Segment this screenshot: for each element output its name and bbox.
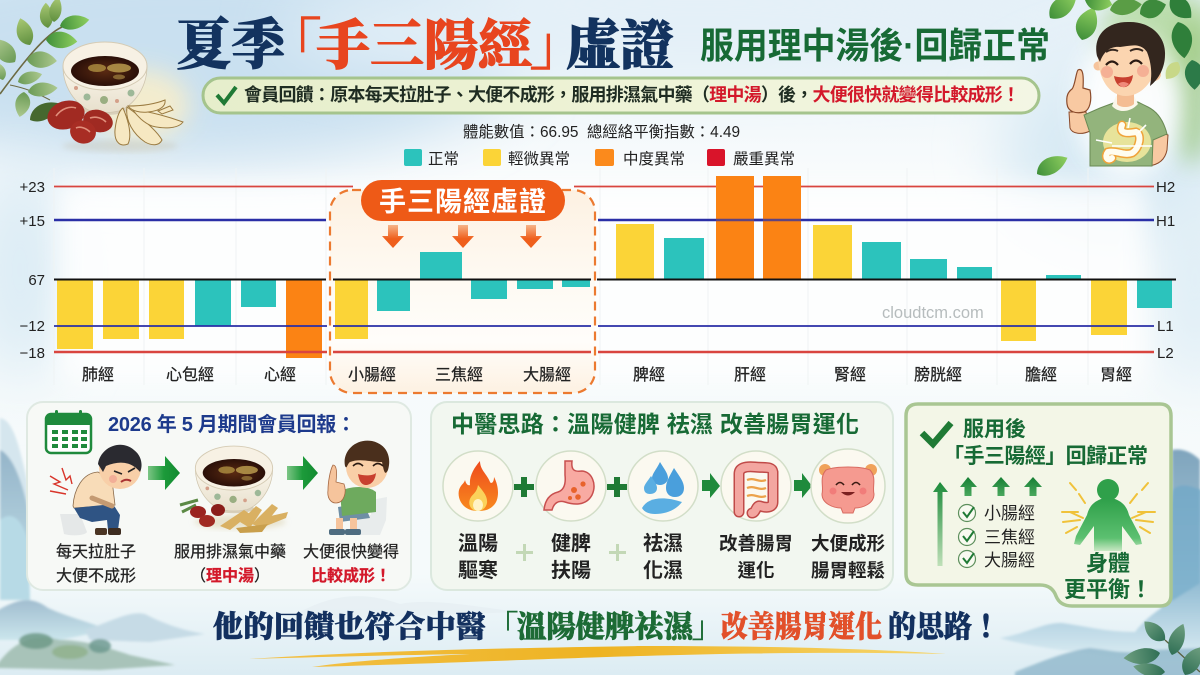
footer conclusion bbox=[213, 610, 1000, 644]
footer conclusion: 」 bbox=[692, 611, 722, 644]
plus bbox=[607, 477, 627, 497]
caption: warm yang: 溫陽 bbox=[458, 532, 498, 555]
title: 夏季 bbox=[176, 15, 289, 76]
caption: intestines: 改善腸胃 bbox=[719, 533, 793, 554]
icon: check bbox=[217, 87, 236, 103]
meridian labels: 膀胱經 bbox=[914, 366, 962, 384]
checklist: 小腸經 bbox=[984, 504, 1035, 523]
icon: happy boy on toilet bbox=[328, 441, 389, 535]
title: 手三陽經 bbox=[316, 16, 532, 76]
leaves bottom-right bbox=[1123, 617, 1200, 675]
footer conclusion: 改善腸胃運化 bbox=[721, 611, 882, 644]
icon: smiling intestine bbox=[811, 449, 885, 523]
icon: intestines bbox=[721, 451, 791, 521]
text: before bbox=[56, 543, 136, 585]
red dates bbox=[44, 96, 115, 146]
member feedback banner: 會員回饋：原本每天拉肚子、大便不成形，服用排濕氣中藥（理中湯）後，大便很快就變得比較成形！ bbox=[244, 84, 1020, 105]
meridian labels: 心包經 bbox=[166, 366, 214, 384]
caption: spleen: 健脾 bbox=[551, 532, 591, 555]
gold brush stroke bbox=[249, 646, 946, 667]
callout pill bbox=[361, 180, 565, 221]
highlight box: three yang meridians bbox=[330, 190, 595, 393]
axis labels: L1 bbox=[1157, 318, 1174, 335]
text: medicine: 服用排濕氣中藥 bbox=[174, 543, 286, 561]
title: 「 bbox=[266, 15, 321, 76]
legend: 輕微異常 bbox=[508, 150, 570, 168]
heading bbox=[943, 418, 1148, 468]
icon: calendar bbox=[46, 410, 91, 453]
panel: after treatment bbox=[906, 404, 1171, 606]
legend bbox=[404, 149, 795, 168]
heading: 2026 年 5 月期間會員回報： bbox=[108, 412, 356, 436]
footer conclusion: 溫陽健脾祛濕 bbox=[517, 611, 696, 644]
member feedback banner bbox=[203, 78, 1039, 113]
icon: water drops bbox=[628, 451, 698, 521]
panel: TCM reasoning bbox=[431, 402, 893, 590]
big arrow up bbox=[933, 482, 948, 566]
axis labels: H2 bbox=[1156, 179, 1175, 196]
mountains right bbox=[1000, 449, 1200, 675]
axis labels bbox=[20, 179, 1175, 362]
caption: spleen bbox=[551, 532, 591, 582]
caption: intestines bbox=[719, 533, 793, 581]
icon: herbal bowl bbox=[180, 446, 288, 533]
arrows down bbox=[382, 225, 542, 248]
meridian labels: 肺經 bbox=[82, 366, 114, 384]
arrow bbox=[287, 456, 318, 490]
meridian labels: 大腸經 bbox=[523, 366, 571, 384]
caption: dampness: 化濕 bbox=[643, 559, 683, 582]
meridian labels: 脾經 bbox=[633, 366, 665, 384]
text: after bbox=[303, 543, 399, 585]
icon: stomach bbox=[536, 451, 606, 521]
caption: spleen: 扶陽 bbox=[551, 559, 591, 582]
subtitle: 服用理中湯後·回歸正常 bbox=[700, 25, 1050, 66]
icon: check bbox=[922, 423, 951, 444]
footer conclusion: 他的回饋也符合中醫 bbox=[213, 610, 486, 644]
footer conclusion: 「 bbox=[488, 611, 518, 644]
caption: result: 大便成形 bbox=[811, 533, 885, 554]
arrow bbox=[702, 473, 720, 498]
mist hills bottom bbox=[300, 596, 520, 620]
checklist: 三焦經 bbox=[984, 528, 1035, 547]
arrow bbox=[148, 456, 180, 490]
title: 虛證 bbox=[566, 16, 674, 76]
text: before: 大便不成形 bbox=[56, 567, 136, 585]
meridian labels: 肝經 bbox=[734, 366, 766, 384]
arrow bbox=[794, 473, 812, 498]
legend: 嚴重異常 bbox=[733, 150, 795, 168]
legend: 中度異常 bbox=[623, 150, 685, 168]
illustration: herbal soup bowl with dates and licorice bbox=[44, 42, 190, 152]
physical values: 體能數值：66.95 總經絡平衡指數：4.49 bbox=[463, 123, 740, 141]
legend: 正常 bbox=[428, 150, 459, 168]
axis labels: L2 bbox=[1157, 345, 1174, 362]
plus bbox=[514, 477, 534, 497]
faint plus bbox=[609, 544, 626, 561]
shirt bbox=[1084, 102, 1167, 166]
heading: 中醫思路：溫陽健脾 祛濕 改善腸胃運化 bbox=[451, 411, 859, 437]
checklist bbox=[958, 504, 1035, 570]
meridian labels: 腎經 bbox=[834, 366, 866, 384]
meridian labels: 小腸經 bbox=[348, 366, 396, 384]
meridian labels: 胃經 bbox=[1100, 366, 1132, 384]
axis labels: H1 bbox=[1156, 213, 1175, 230]
text: medicine bbox=[174, 543, 286, 585]
leaves top-left bbox=[0, 0, 91, 126]
text: after: 比較成形！ bbox=[311, 566, 391, 585]
caption: dampness bbox=[643, 532, 683, 582]
top-right foliage bbox=[1033, 0, 1200, 181]
faint plus bbox=[516, 544, 533, 561]
caption: result bbox=[811, 533, 885, 581]
icon: flame bbox=[443, 451, 513, 521]
meridian labels bbox=[82, 366, 1132, 384]
axis labels: +23 bbox=[20, 179, 45, 196]
checklist: 大腸經 bbox=[984, 551, 1035, 570]
arm bbox=[1069, 112, 1090, 133]
footer conclusion: 的思路！ bbox=[888, 611, 1000, 644]
icon: balanced body bbox=[1062, 479, 1155, 551]
licorice slices bbox=[115, 100, 183, 145]
bars bbox=[57, 176, 1172, 358]
caption: dampness: 祛濕 bbox=[643, 532, 683, 555]
axis labels: −18 bbox=[20, 345, 45, 362]
threshold lines bbox=[54, 186, 1154, 220]
meridian labels: 心經 bbox=[264, 366, 296, 384]
callout pill: 手三陽經虛證 bbox=[379, 187, 547, 217]
icon: man with stomach ache bbox=[50, 445, 142, 535]
meridian labels: 膽經 bbox=[1025, 366, 1057, 384]
soft white behind chart bbox=[60, 185, 1145, 380]
caption: result: 腸胃輕鬆 bbox=[811, 560, 885, 581]
meridian bar chart bbox=[20, 168, 1176, 393]
small arrows up bbox=[960, 477, 1042, 496]
caption: body balance: 身體 bbox=[1086, 551, 1130, 576]
text: after: 大便很快變得 bbox=[303, 543, 399, 561]
caption: body balance bbox=[1064, 551, 1152, 602]
title: 」 bbox=[530, 15, 585, 76]
axis labels: +15 bbox=[20, 213, 45, 230]
axis labels: 67 bbox=[28, 272, 45, 289]
glowing stomach bbox=[1096, 118, 1152, 162]
text: medicine: （理中湯） bbox=[190, 567, 270, 585]
text: before: 每天拉肚子 bbox=[56, 543, 136, 561]
watermark: cloudtcm.com bbox=[882, 304, 984, 322]
head bbox=[1094, 62, 1102, 70]
caption: intestines: 運化 bbox=[737, 560, 775, 581]
caption: warm yang: 驅寒 bbox=[458, 558, 498, 582]
panel: member report bbox=[27, 402, 411, 590]
axis labels: −12 bbox=[20, 318, 45, 335]
fist bbox=[1067, 70, 1091, 113]
heading: 「手三陽經」回歸正常 bbox=[943, 445, 1148, 468]
heading: 服用後 bbox=[963, 418, 1026, 441]
illustration: smiling boy with thumb up bbox=[1067, 22, 1168, 166]
meridian labels: 三焦經 bbox=[435, 366, 483, 384]
caption: warm yang bbox=[458, 532, 498, 582]
title bbox=[176, 15, 674, 76]
caption: body balance: 更平衡！ bbox=[1064, 577, 1152, 602]
mountains left bbox=[0, 418, 205, 670]
